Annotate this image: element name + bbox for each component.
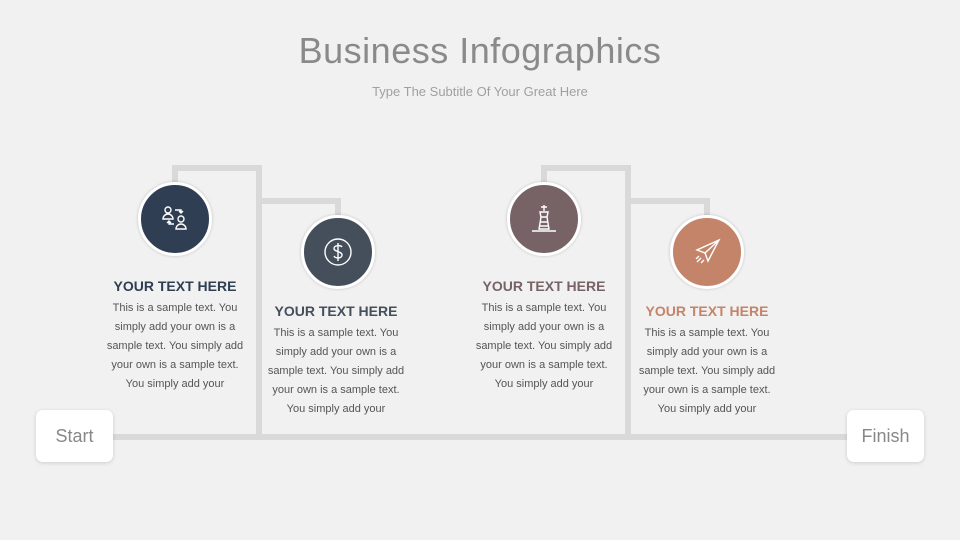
step 1 text: You simply add your [126,378,224,390]
icon: dollar [301,215,375,289]
step 4 text: YOUR TEXT HERE [646,303,768,319]
step 2 text: your own is a sample text. [272,384,400,396]
step 2 text: YOUR TEXT HERE [275,303,397,319]
step 1 text: YOUR TEXT HERE [114,278,236,294]
finish box: Finish [861,426,910,446]
step 1 text: This is a sample text. You [113,302,237,314]
step 2 text: sample text. You simply add [268,365,404,377]
step 1 text: sample text. You simply add [107,340,243,352]
step 3 text: You simply add your [495,378,593,390]
step 3 text: This is a sample text. You [482,302,606,314]
step 1 text: your own is a sample text. [111,359,239,371]
finish box [847,410,924,462]
icon: paper plane [670,215,744,289]
step 2 text [268,303,404,415]
step 2 text: You simply add your [287,403,385,415]
subtitle: Type The Subtitle Of Your Great Here [372,84,588,99]
step 3 text [476,278,612,390]
step 1 text: simply add your own is a [115,321,235,333]
step 4 text: You simply add your [658,403,756,415]
step 2 text: This is a sample text. You [274,327,398,339]
step 2 text: simply add your own is a [276,346,396,358]
title: Business Infographics [299,30,661,71]
step 4 text: simply add your own is a [647,346,767,358]
icon: chess king [507,182,581,256]
start box: Start [55,426,94,446]
step 1 text [107,278,243,390]
start box [36,410,113,462]
step 4 text: This is a sample text. You [645,327,769,339]
step 3 text: your own is a sample text. [480,359,608,371]
step 4 text [639,303,775,415]
step 4 text: sample text. You simply add [639,365,775,377]
step 3 text: sample text. You simply add [476,340,612,352]
step 3 text: simply add your own is a [484,321,604,333]
icon: people exchange [138,182,212,256]
step 3 text: YOUR TEXT HERE [483,278,605,294]
step 4 text: your own is a sample text. [643,384,771,396]
